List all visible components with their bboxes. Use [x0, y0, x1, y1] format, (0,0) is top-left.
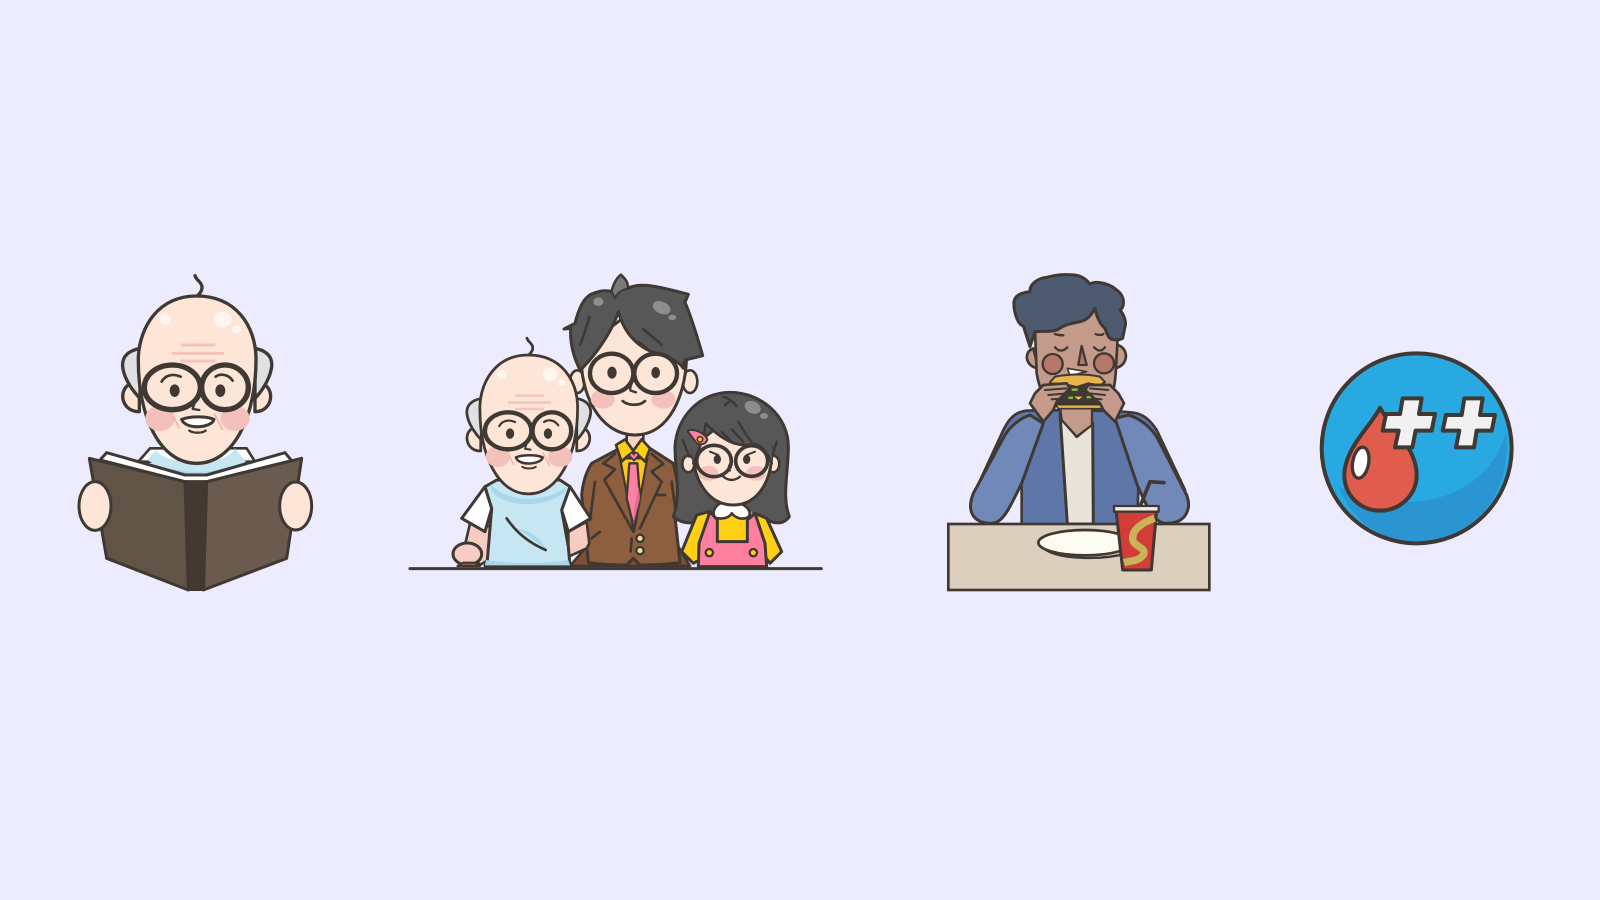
open book	[89, 453, 302, 590]
fringe	[692, 394, 772, 463]
face	[693, 417, 772, 505]
collar	[616, 439, 650, 462]
right sleeve	[1115, 415, 1188, 523]
daughter	[673, 392, 789, 567]
plate	[1038, 530, 1132, 558]
suit	[582, 448, 680, 565]
illustration: grandfather reading a book	[79, 276, 312, 590]
lapels	[603, 454, 663, 532]
shirt collar and bib	[138, 448, 255, 480]
neck	[627, 430, 643, 455]
hair clip	[687, 430, 707, 444]
back hair	[673, 392, 789, 523]
t-shirt	[1060, 413, 1093, 524]
grandfather	[453, 338, 591, 566]
ears	[570, 370, 585, 393]
jacket torso	[976, 410, 1185, 525]
arms	[465, 522, 589, 565]
ears	[682, 456, 694, 472]
buttons	[636, 535, 644, 542]
face	[581, 310, 687, 435]
cheeks	[1043, 354, 1063, 374]
pinafore	[698, 512, 767, 567]
ears	[1027, 345, 1126, 368]
left hand	[79, 482, 111, 530]
icon: blood drop with double plus	[1322, 353, 1512, 543]
blouse panel	[712, 512, 752, 543]
plus sign left	[1383, 398, 1435, 447]
vest	[485, 480, 570, 566]
illustration: three generations family	[410, 275, 821, 569]
tie	[627, 463, 640, 525]
left hand	[1030, 383, 1070, 422]
drink cup	[1114, 482, 1164, 570]
back of arms	[570, 547, 690, 566]
head	[1014, 275, 1126, 400]
right hand	[280, 482, 312, 530]
glasses	[697, 445, 731, 477]
ground line	[410, 564, 821, 573]
shirt	[620, 458, 647, 532]
blue disc	[1322, 353, 1512, 543]
right hand	[1085, 385, 1124, 422]
dress sleeves	[682, 512, 782, 563]
hair	[1014, 275, 1126, 347]
disc shade	[1338, 430, 1507, 543]
head	[123, 276, 272, 463]
glasses	[590, 354, 633, 393]
illustration: man eating a burger	[948, 275, 1209, 590]
head	[467, 338, 591, 494]
drop highlight	[1350, 446, 1371, 479]
eyes and brows	[1055, 334, 1105, 351]
hair	[564, 275, 703, 370]
collar	[714, 503, 750, 519]
plus sign right	[1443, 398, 1495, 447]
nose	[1078, 346, 1087, 365]
face	[1035, 310, 1118, 400]
t-shirt sleeves	[462, 487, 591, 532]
hand	[453, 543, 482, 565]
father	[564, 275, 703, 566]
left sleeve	[971, 415, 1043, 523]
table	[948, 524, 1209, 590]
neck	[1060, 407, 1092, 437]
blood drop	[1344, 408, 1417, 511]
burger	[1050, 375, 1105, 409]
